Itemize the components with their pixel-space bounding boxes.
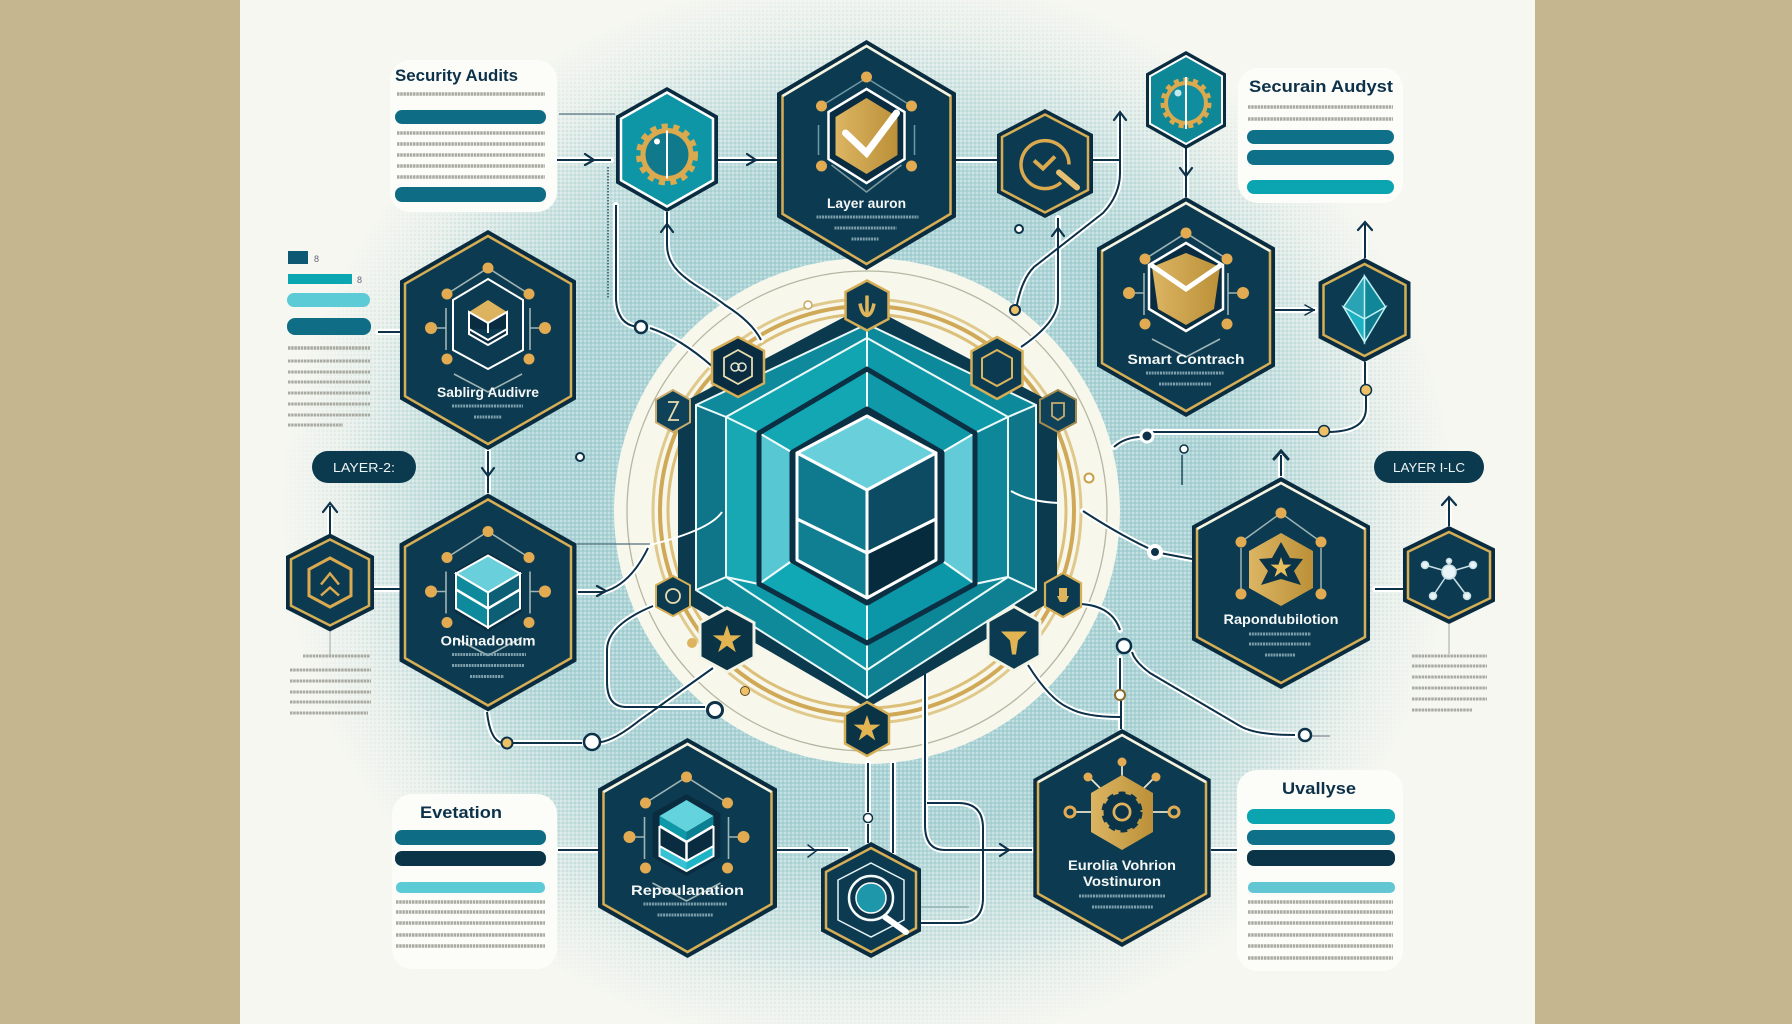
heading: securain audyst: Securain Audyst: [1249, 77, 1393, 96]
label: Layer auron: [827, 195, 906, 211]
orbit badge: upper left: [712, 337, 764, 397]
halftone teal background: [280, 0, 1455, 1024]
central page panel: [240, 0, 1535, 1024]
hexagon: sablirg audivre: [400, 230, 576, 450]
icon: gold shield with check: [816, 72, 917, 192]
side margin: left tan band: [0, 0, 240, 1024]
icon: teal stacked cube: [425, 526, 551, 656]
label: [1068, 857, 1176, 889]
small hexagon: chevron badge: [286, 534, 374, 632]
left legend bars: [287, 251, 371, 425]
hexagon: repoulanation: [598, 738, 777, 958]
label: Onlinadonum: [440, 632, 536, 648]
left legend bars: 8: [357, 275, 362, 285]
left legend bars: 8: [314, 254, 319, 264]
connector wires: dark core: [330, 113, 1449, 923]
pill label: layer i-lc: [1374, 451, 1484, 483]
label: Repoulanation: [631, 882, 744, 898]
label: Eurolia Vohrion: [1068, 857, 1176, 873]
text block under left small hexagon: [290, 656, 371, 713]
pill label: layer-2: [312, 451, 416, 483]
label: Smart Contrach: [1128, 351, 1244, 367]
orbit badge: star right: [988, 606, 1040, 670]
inner teal band facets: [759, 369, 975, 643]
hexagon: onlinadonum: [400, 494, 576, 712]
orbit badge: left lower: [656, 576, 690, 616]
hexagon: rapondubilotion: [1192, 477, 1370, 689]
icon: chevrons: [309, 558, 351, 607]
icon: gear: [1163, 77, 1209, 129]
label: Sablirg Audivre: [437, 384, 539, 400]
central layered hexagon: [650, 305, 1059, 708]
heading: security audits: Security Audits: [395, 66, 518, 85]
heading: uvallyse: Uvallyse: [1282, 779, 1356, 798]
connector wires: white halo: [330, 113, 1449, 923]
panel: securain audyst: [1238, 68, 1403, 203]
thin annotation leaders: [330, 114, 1449, 907]
central circular backdrop with rings: [614, 258, 1120, 764]
icon: diamond: [1344, 276, 1386, 342]
pill label: layer i-lc: LAYER I-LC: [1393, 461, 1465, 475]
orbit badge: right lower: [1045, 573, 1081, 617]
scattered connector nodes: [502, 225, 1372, 822]
small hexagon: magnifying glass: [821, 842, 921, 958]
icon: check in ring: [1021, 141, 1077, 189]
icon: network nodes: [1422, 558, 1476, 600]
label: Vostinuron: [1083, 873, 1161, 889]
small hexagon: network: [1403, 526, 1495, 624]
side margin: right tan band: [1535, 0, 1792, 1024]
orbit badge: star left: [700, 608, 754, 672]
small hexagon: teal gear right: [1146, 51, 1226, 149]
hexagon: eurolia vohrion: [1033, 729, 1211, 947]
orbit badge: top: [846, 280, 888, 330]
heading: evetation: Evetation: [420, 803, 502, 822]
orbit badge: right upper: [1040, 390, 1076, 432]
outer dark hexagon: [678, 305, 1057, 708]
icon: gold contract cube: [1123, 228, 1249, 357]
icon: gold gear hexagon: [1065, 758, 1179, 850]
icon: hexagon cube: [425, 262, 551, 392]
hexagon: layer auron: [777, 40, 956, 270]
panel: evetation: [392, 794, 557, 969]
orbit badge: star bottom: [845, 702, 889, 756]
icon: magnifier: [849, 876, 906, 932]
icon: gear: [639, 126, 695, 182]
orbit badge: left upper: [656, 390, 690, 432]
icon: gold hexagon star: [1236, 508, 1326, 606]
orbit badge: upper right: [972, 337, 1022, 399]
hexagon: smart contrach: [1097, 197, 1275, 417]
text block under right small hexagon: [1412, 656, 1487, 710]
central cube: [797, 416, 936, 598]
icon: teal and dark stacked cube: [624, 772, 750, 901]
inner white wires: [650, 491, 1059, 545]
panel: uvallyse: [1237, 770, 1403, 971]
small hexagon: ethereum diamond: [1318, 258, 1410, 362]
pill label: layer-2: LAYER-2:: [333, 461, 395, 475]
outer teal band facets: [696, 324, 1036, 698]
middle teal band facets: [726, 338, 1008, 670]
small hexagon: magnifier check: [997, 109, 1093, 218]
label: Rapondubilotion: [1224, 611, 1338, 627]
arrowheads: [323, 112, 1456, 857]
small hexagon: teal gear left: [616, 87, 718, 212]
panel: security audits: [390, 60, 557, 212]
